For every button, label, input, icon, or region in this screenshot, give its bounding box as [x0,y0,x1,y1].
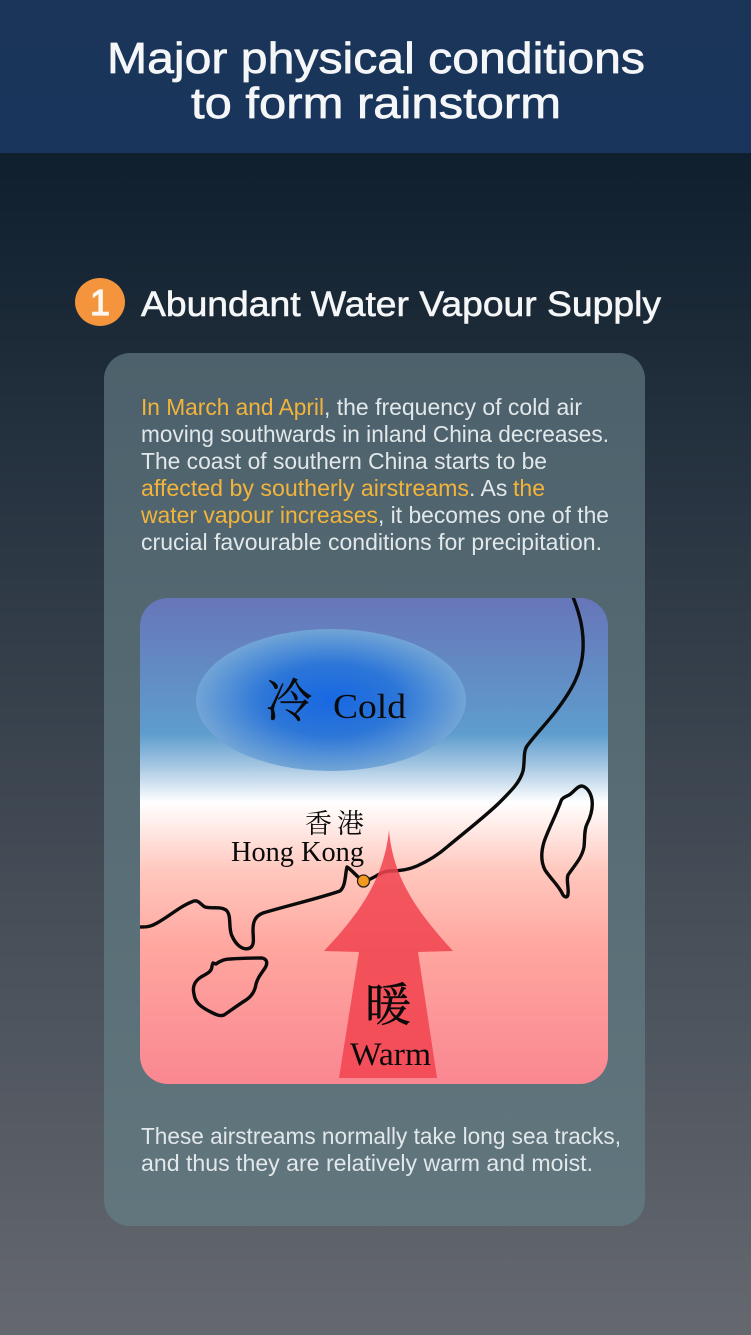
intro text block: . As [469,475,507,501]
label: Hong Kong [231,809,364,868]
island: Hainan [193,958,267,1016]
label: Hong Kong: 香港 [305,809,364,839]
title: Major physical conditions [107,34,645,83]
intro text block: water vapour increases [140,502,378,528]
cold air mass [196,629,466,771]
intro text block: In March and April [141,394,324,420]
panel: water vapour explanation [104,353,645,1226]
section heading text: Abundant Water Vapour Supply [141,285,662,324]
closing text block: and thus they are relatively warm and moist. [141,1150,593,1176]
arrow: warm southerly airstream [324,830,453,1078]
coastline [141,597,583,949]
label: warm: 暖 [365,980,411,1031]
title: to form rainstorm [191,79,561,128]
cold air mass: Cold [333,687,407,726]
intro text block: , the frequency of cold air [324,394,582,420]
intro text block [140,394,609,555]
intro text block: crucial favourable conditions for precipitation. [141,529,602,555]
intro text block: the [513,475,545,501]
intro text block: , it becomes one of the [378,502,609,528]
map: cold and warm air over southern China [140,597,608,1084]
intro text block: moving southwards in inland China decreases. [141,421,609,447]
cold air mass: 冷 [266,676,312,727]
icon: number badge 1: 1 [90,282,110,323]
intro text block: The coast of southern China starts to be [141,448,547,474]
section heading [75,278,662,326]
header band [0,0,751,153]
title [107,34,645,128]
label: warm: Warm [350,1037,431,1073]
closing text block: These airstreams normally take long sea tracks, [141,1123,621,1149]
label: warm [350,982,431,1066]
closing text block [141,1123,621,1176]
label: Hong Kong: Hong Kong [231,836,364,868]
icon: number badge 1 [75,278,125,326]
island: Taiwan [542,786,592,897]
marker: Hong Kong [358,875,370,887]
intro text block: affected by southerly airstreams [141,475,469,501]
